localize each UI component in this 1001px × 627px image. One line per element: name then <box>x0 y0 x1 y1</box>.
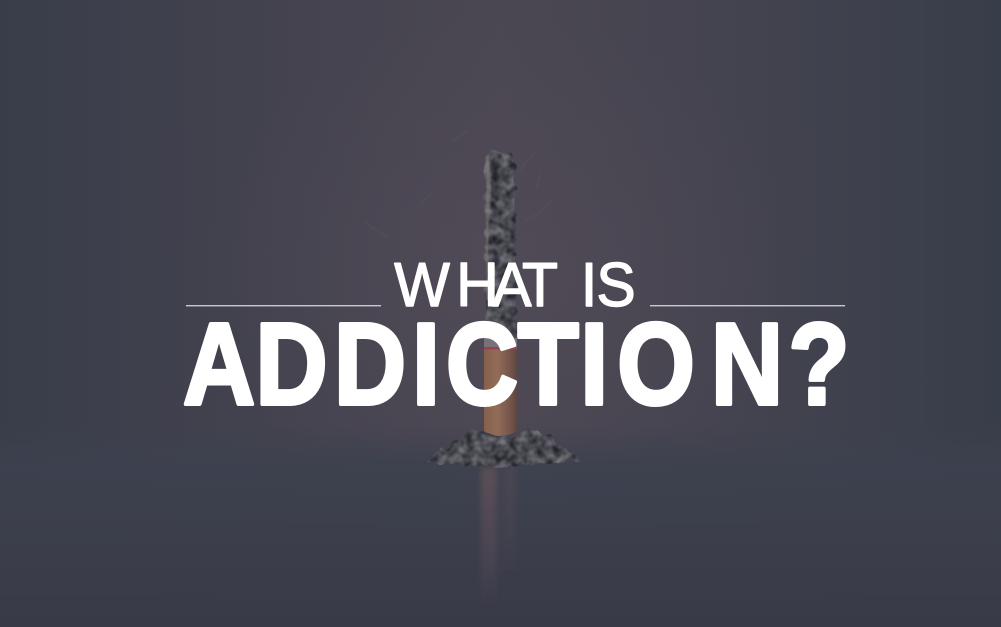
smoke wisps <box>365 131 552 238</box>
burnt ash column <box>484 151 517 342</box>
right rule <box>650 305 845 306</box>
title block <box>183 250 849 429</box>
ash pile <box>424 429 584 466</box>
photo: cigarette <box>365 131 584 608</box>
filter tip <box>484 338 517 436</box>
reflection <box>481 468 516 608</box>
left rule <box>186 305 381 306</box>
heading: what is: WHAT IS <box>394 250 636 319</box>
red band <box>484 347 517 350</box>
ash end of tip <box>484 338 517 347</box>
heading: addiction: ADDICTION? <box>183 299 849 429</box>
